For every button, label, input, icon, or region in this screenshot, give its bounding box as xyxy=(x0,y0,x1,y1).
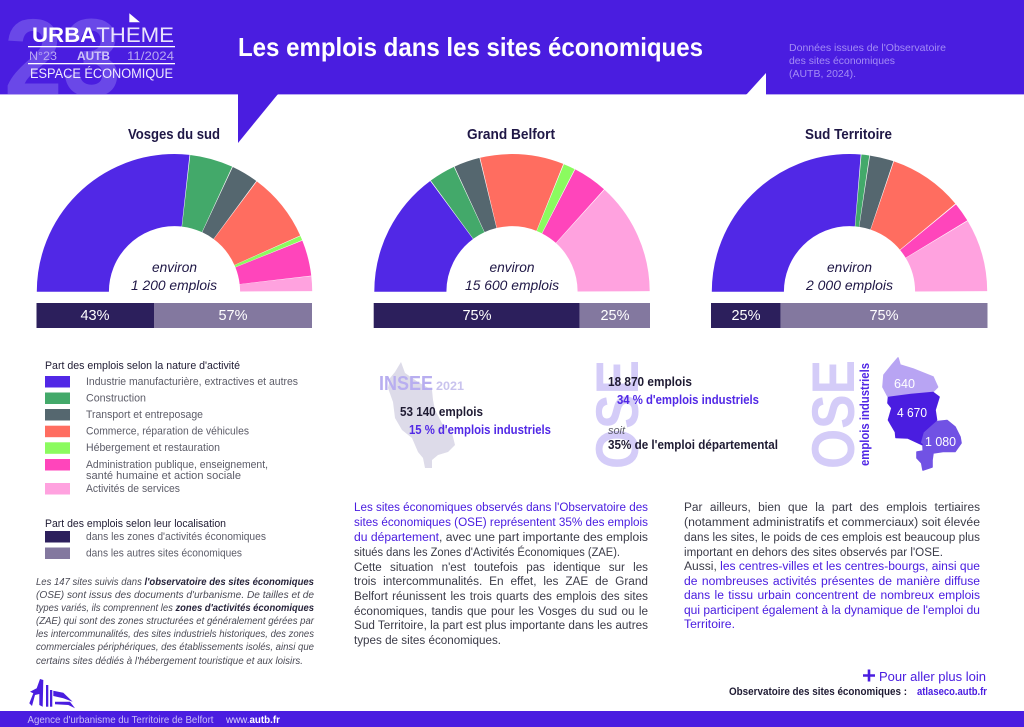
location bar: 25% xyxy=(731,308,761,324)
text block: middle column: Les sites économiques observés dans l'Observatoire des xyxy=(354,502,648,514)
INSEE label: INSEE xyxy=(379,373,433,395)
text block: middle column: Sud Territoire, la part est plus importante dans les autres xyxy=(354,620,648,632)
publication logo block: Urbathème: 11/2024 xyxy=(127,49,174,63)
header band xyxy=(0,0,1024,143)
icon: plus xyxy=(863,670,875,682)
publication logo block: Urbathème: 23 xyxy=(4,0,121,120)
figure: 34 %: 34 % d'emplois industriels xyxy=(617,393,759,407)
text block: definition of sites xyxy=(36,577,315,667)
text block: middle column: Cette situation n'est toutefois pas identique sur les xyxy=(354,562,648,574)
legend heading: Part des emplois selon la nature d'activité xyxy=(45,360,240,372)
centre label: environ xyxy=(827,259,872,275)
legend: nature d'activité: Commerce, réparation de véhicules xyxy=(86,426,249,438)
legend: nature d'activité: Transport et entreposage xyxy=(86,409,203,421)
centre label: environ xyxy=(152,259,197,275)
icon: AUTB logo xyxy=(29,679,75,708)
text block: middle column: types de sites économiques. xyxy=(354,635,501,647)
heading: Sud Territoire: Sud Territoire xyxy=(805,126,892,143)
region values: 640 xyxy=(894,376,915,391)
location bar xyxy=(711,303,988,328)
further reading link xyxy=(729,670,988,698)
half-donut chart: Vosges du sud xyxy=(73,190,276,292)
further reading link: atlaseco.autb.fr xyxy=(917,686,988,698)
heading: Vosges du sud: Vosges du sud xyxy=(128,126,220,143)
legend: nature d'activité xyxy=(45,360,298,495)
footer band xyxy=(0,711,1024,727)
text block: right column: dans les sites, le poids de ces emplois est beaucoup plus xyxy=(684,532,980,544)
legend: localisation: dans les autres sites économiques xyxy=(86,548,242,560)
legend: nature d'activité: Construction xyxy=(86,392,146,404)
legend: nature d'activité: Hébergement et restauration xyxy=(86,442,220,454)
main title: Les emplois dans les sites économiques xyxy=(238,32,703,62)
OSE figures xyxy=(584,360,778,469)
text block: definition of sites: Les 147 sites suivis dans l'observatoire des sites économiques xyxy=(36,577,314,588)
text block: definition of sites: les intercommunalités, des sites industriels historiques, des zones xyxy=(36,629,314,640)
publication logo block: Urbathème: ESPACE ÉCONOMIQUE xyxy=(30,66,173,81)
text block: right column: important en dehors des sites observés par l'OSE. xyxy=(684,547,943,559)
text block: definition of sites: types variés, ils comprennent les zones d'activités économiques xyxy=(36,603,314,614)
location bar: 75% xyxy=(869,308,899,324)
text block: middle column: du département , avec une part importante des emplois xyxy=(354,532,648,544)
text block: right column: de nombreuses activités présentes de manière diffuse xyxy=(684,576,980,588)
text block: middle column: économiques, tandis que pour les Vosges du sud ou le xyxy=(354,606,648,618)
publication logo block: Urbathème: AUTB xyxy=(77,49,110,63)
location bar xyxy=(374,303,650,328)
half-donut chart: Grand Belfort xyxy=(410,190,614,292)
further reading link: Pour aller plus loin xyxy=(879,670,986,684)
source note: Données issues de l'Observatoire xyxy=(789,42,946,54)
figure: 15 %: 15 % d'emplois industriels xyxy=(409,423,551,437)
publication logo block: Urbathème: URBATHEME xyxy=(32,24,174,47)
text block: right column: Territoire. xyxy=(684,619,735,631)
legend: localisation xyxy=(45,518,266,560)
figure: 18 870 emplois: 18 870 emplois xyxy=(608,375,692,389)
publication logo block: Urbathème: N°23 xyxy=(29,49,57,63)
centre label: 15 600 emplois xyxy=(465,277,559,293)
publication logo block: Urbathème xyxy=(8,13,175,94)
text block: middle column: trois intercommunalités. En effet, les ZAE de Grand xyxy=(354,576,648,588)
centre label: 1 200 emplois xyxy=(131,277,217,293)
watermark OSE: OSE xyxy=(800,360,867,469)
text block: right column: dans le tissu urbain concentrent de nombreux emplois xyxy=(684,590,980,602)
figure: 35 %: 35% de l'emploi départemental xyxy=(608,438,778,452)
legend: nature d'activité: Activités de services xyxy=(86,483,180,495)
text block: definition of sites: (ZAE) qui sont des zones structurées et généralement gérées par xyxy=(36,616,315,627)
half-donut chart: Sud Territoire xyxy=(748,190,951,292)
source note: (AUTB, 2024). xyxy=(789,68,856,80)
legend heading: Part des emplois selon leur localisation xyxy=(45,518,226,530)
further reading link: Observatoire des sites économiques : xyxy=(729,686,907,698)
legend: localisation: dans les zones d'activités économiques xyxy=(86,531,266,543)
region: Sud Territoire xyxy=(917,420,961,470)
INSEE label: 2021 xyxy=(436,379,464,393)
source note xyxy=(789,42,946,80)
location bar: 25% xyxy=(600,308,630,324)
legend: nature d'activité: Administration publique, enseignement, xyxy=(86,459,268,471)
text block: definition of sites: certains sites dédiés à l'hébergement touristique et aux loisirs. xyxy=(36,656,303,667)
panel: Vosges du sud xyxy=(36,126,312,328)
footer band: www.autb.fr xyxy=(225,714,280,726)
text block: right column: Par ailleurs, bien que la part des emplois tertiaires xyxy=(684,502,980,514)
text block: middle column: situés dans les Zones d'Activités Économiques (ZAE). xyxy=(354,546,620,559)
centre label xyxy=(465,259,559,293)
text block: definition of sites: commerciales périphériques, des établissements isolés, ainsi que xyxy=(36,642,314,653)
centre label: environ xyxy=(490,259,535,275)
text block: right column xyxy=(684,502,980,631)
footer band: Agence d'urbanisme du Territoire de Belfort xyxy=(28,714,214,726)
source note: des sites économiques xyxy=(789,55,895,67)
legend: nature d'activité: Industrie manufacturière, extractives et autres xyxy=(86,376,298,388)
text block: right column: qui participent également à la dynamique de l'emploi du xyxy=(684,605,980,617)
region values xyxy=(894,376,956,449)
region values: 4 670 xyxy=(897,405,927,420)
text block: middle column xyxy=(354,502,648,647)
watermark OSE: OSE xyxy=(584,360,651,469)
text block: middle column: Belfort réunissent les trois quarts des emplois des sites xyxy=(354,591,648,603)
text block: right column: (notamment administratifs et commerciaux) soit élevée xyxy=(684,517,980,529)
centre label xyxy=(805,259,893,293)
region values: 1 080 xyxy=(925,434,956,449)
centre label: 2 000 emplois xyxy=(805,277,893,293)
map: Territoire de Belfort silhouette xyxy=(388,362,455,468)
panel: Sud Territoire xyxy=(711,126,988,328)
location bar xyxy=(36,303,312,328)
text block: middle column: sites économiques (OSE) représentent 35% des emplois xyxy=(354,517,648,529)
location bar: 43% xyxy=(80,308,110,324)
rotated label: emplois industriels xyxy=(858,363,872,466)
region: Vosges du sud xyxy=(883,358,938,396)
text block: definition of sites: (OSE) sont issus des documents d'urbanisme. De tailles et de xyxy=(36,590,314,601)
INSEE figures xyxy=(379,362,551,468)
figure: 53 140 emplois: 53 140 emplois xyxy=(400,405,483,419)
region: Grand Belfort xyxy=(888,392,939,444)
location bar: 75% xyxy=(462,308,492,324)
soit: soit xyxy=(608,425,626,437)
text block: right column: Aussi, les centres-villes et les centres-bourgs, ainsi que xyxy=(684,561,980,573)
OSE map xyxy=(800,358,961,470)
panel: Grand Belfort xyxy=(374,126,650,328)
centre label xyxy=(131,259,217,293)
heading: Grand Belfort: Grand Belfort xyxy=(467,126,555,143)
legend: nature d'activité: santé humaine et action sociale xyxy=(86,470,241,482)
location bar: 57% xyxy=(218,308,248,324)
